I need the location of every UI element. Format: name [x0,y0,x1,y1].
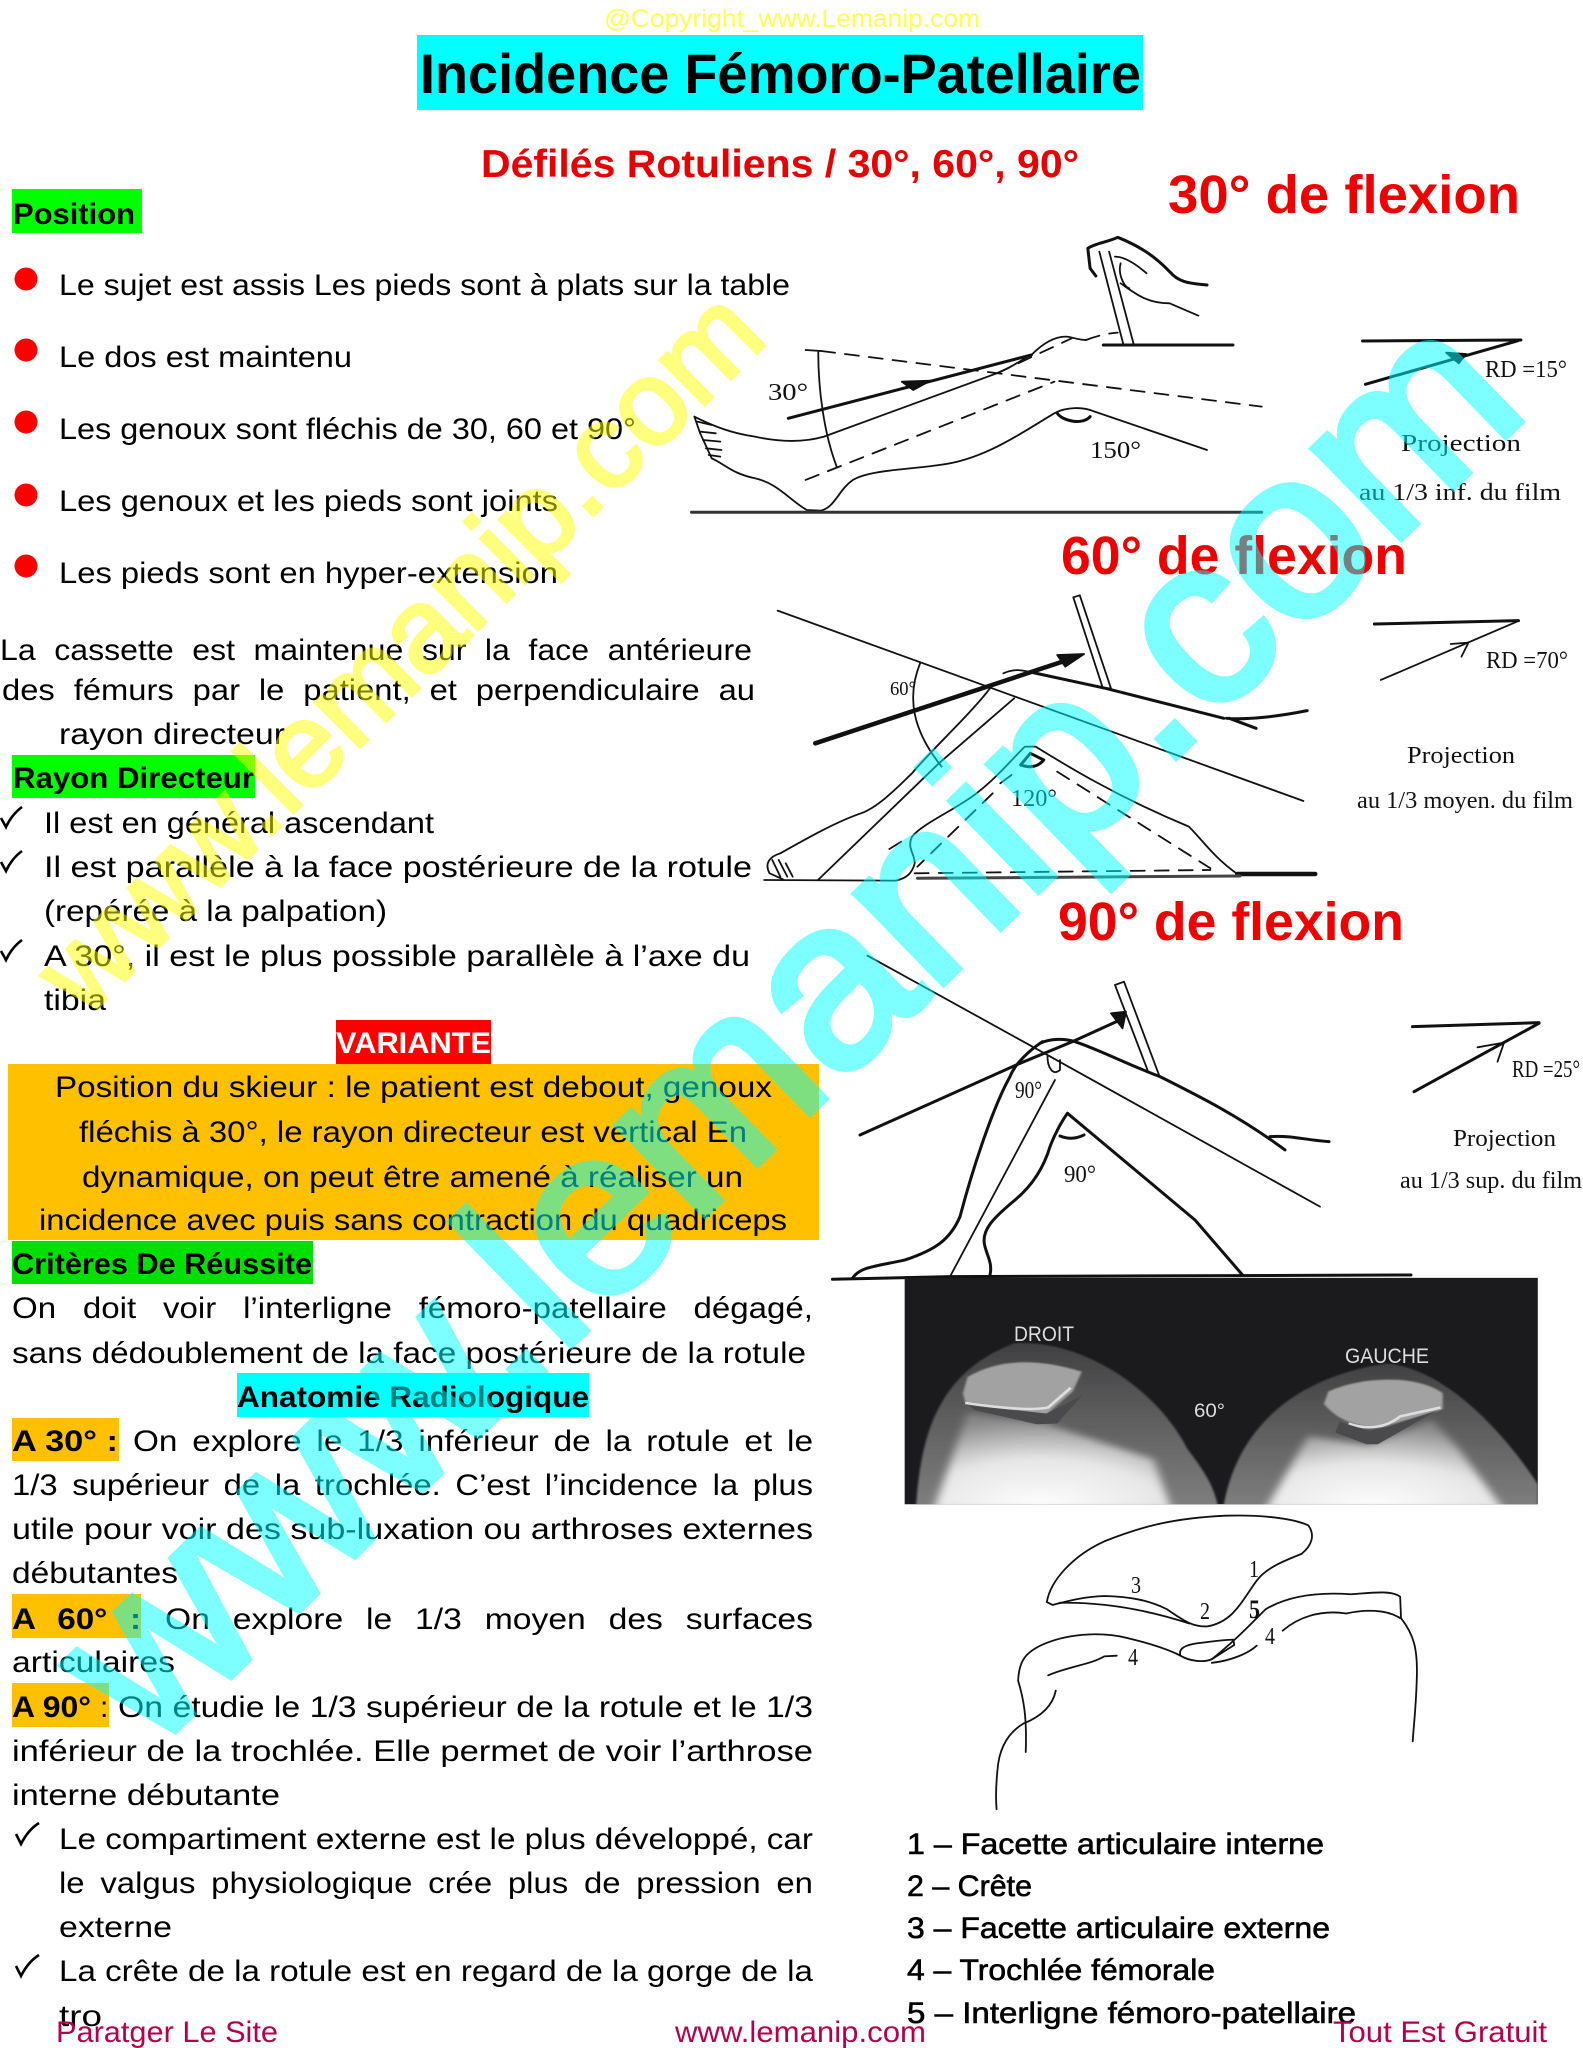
text block: A 30° [12,1418,813,1590]
text block: A 30°: A 30° : [12,1425,118,1458]
text block: A 60° [12,1594,813,1679]
checklist: rayon directeur [1,807,752,1017]
panel: position [0,189,790,751]
heading: 90° de flexion: 90° de flexion [1058,892,1404,952]
bullet list: position: Les genoux sont fléchis de 30, 60 et 90° [59,413,636,446]
panel: critères de réussite [12,1241,813,1370]
x-ray: knees at 60°: DROIT [1014,1323,1074,1346]
legend: anatomy numbers: 4 – Trochlée fémorale [907,1954,1215,1987]
illustration: 90° flexion: 90° [1064,1162,1096,1188]
text block: A 30°: débutantes [12,1557,178,1590]
illustration: 60° flexion: 120° [1011,786,1057,812]
legend: anatomy numbers [907,1828,1356,2030]
panel: variante [8,1020,819,1240]
bullet list: position: Les pieds sont en hyper-extension [59,557,558,590]
RD diagram 90°: au 1/3 sup. du film [1400,1168,1582,1194]
legend: anatomy numbers: 5 – Interligne fémoro-patellaire [907,1997,1356,2030]
anatomy diagram: patella and trochlea [996,1515,1417,1809]
text block: cassette: La cassette est maintenue sur la face antérieure [0,634,752,667]
RD diagram 90° [1400,1023,1582,1194]
callout: position du skieur: dynamique, on peut être amené à réaliser un [82,1161,743,1194]
illustration: 30° flexion [692,237,1567,512]
legend: anatomy numbers: 2 – Crête [907,1870,1032,1903]
RD diagram 60°: RD =70° [1486,648,1568,674]
panel: rayon directeur [1,755,752,1017]
RD diagram 30°: RD =15° [1485,357,1567,383]
text block: A 60°: On explore le 1/3 moyen des surfaces [165,1603,813,1636]
bullet list: position: Le dos est maintenu [59,341,352,374]
subtitle: Défilés Rotuliens / 30°, 60°, 90° [481,143,1079,186]
bullet list: position [14,268,790,590]
watermark: yellow: www.lemanip.com [9,264,788,1039]
checklist: anatomie: Le compartiment externe est le plus développé, car [59,1823,813,1856]
text block: A 90°: inférieur de la trochlée. Elle permet de voir l’arthrose [12,1735,813,1768]
footer [56,2016,1548,2048]
text block: critères [12,1292,813,1370]
anatomy diagram: patella and trochlea: 3 [1131,1573,1141,1599]
legend: anatomy numbers: 1 – Facette articulaire interne [907,1828,1324,1861]
RD diagram 60°: Projection [1407,743,1515,769]
text block: cassette: des fémurs par le patient, et perpendiculaire au [2,674,755,707]
RD diagram 30° [1359,340,1567,506]
text block: critères: On doit voir l’interligne fémoro-patellaire dégagé, [12,1292,813,1325]
anatomy diagram: patella and trochlea: 1 [1249,1557,1259,1583]
RD diagram 60° [1357,621,1573,814]
checklist: anatomie: externe [59,1911,172,1944]
text block: A 30°: 1/3 supérieur de la trochlée. C’est l’incidence la plus [12,1469,813,1502]
heading: critères de réussite: Critères De Réussite [12,1248,312,1281]
callout: position du skieur [8,1064,819,1240]
checklist: rayon directeur: (repérée à la palpation) [44,895,387,928]
bullet list: position: Les genoux et les pieds sont joints [59,485,558,518]
text block: cassette [0,634,755,751]
heading: 60° de flexion: 60° de flexion [1061,526,1407,586]
text block: cassette: rayon directeur [59,718,285,751]
panel: anatomie radiologique [12,1373,813,2033]
heading: rayon directeur: Rayon Directeur [13,762,254,795]
text block: A 60°: articulaires [12,1646,175,1679]
anatomy diagram: patella and trochlea: 5 [1249,1595,1260,1624]
text block: A 90°: A 90° [12,1691,91,1724]
heading: variante: VARIANTE [336,1027,491,1060]
checklist: anatomie [16,1823,813,2033]
checklist: anatomie: La crête de la rotule est en regard de la gorge de la [59,1955,813,1988]
checklist: rayon directeur: Il est parallèle à la face postérieure de la rotule [44,851,752,884]
RD diagram 90°: Projection [1453,1126,1556,1152]
text block: A 60°: A 60° : [12,1603,141,1636]
x-ray: knees at 60°: 60° [1194,1401,1225,1422]
heading: 30° de flexion: 30° de flexion [1168,165,1520,225]
RD diagram 60°: au 1/3 moyen. du film [1357,788,1573,814]
heading: position [12,189,142,233]
illustration: 90° flexion: 90° [1015,1078,1042,1104]
heading: position: Position [13,198,135,231]
text block: critères: sans dédoublement de la face postérieure de la rotule [12,1337,806,1370]
checklist: rayon directeur: Il est en général ascendant [44,807,435,840]
illustration: 60° flexion: 60° [890,678,916,700]
illustration: 30° flexion: 150° [1090,438,1141,464]
checklist: rayon directeur: A 30°, il est le plus possible parallèle à l’axe du [44,940,750,973]
text block: A 90°: : [100,1691,108,1724]
RD diagram 30°: au 1/3 inf. du film [1359,480,1561,506]
legend: anatomy numbers: 3 – Facette articulaire externe [907,1912,1330,1945]
x-ray: knees at 60° [905,1278,1538,1509]
checklist: rayon directeur: tibia [44,984,106,1017]
illustration: 30° flexion: 30° [768,380,808,406]
text block: A 30°: utile pour voir des sub-luxation ou arthroses externes [12,1513,813,1546]
callout: position du skieur: fléchis à 30°, le rayon directeur est vertical En [79,1116,747,1149]
illustration: 90° flexion [832,956,1582,1279]
x-ray: knees at 60°: GAUCHE [1345,1345,1429,1368]
heading: anatomie radiologique: Anatomie Radiologique [237,1381,589,1414]
illustration: 60° flexion [764,595,1573,881]
copyright line: @Copyright_www.Lemanip.com [604,5,980,33]
title: Incidence Fémoro-Patellaire [420,42,1141,105]
RD diagram 30°: Projection [1401,431,1521,457]
callout: position du skieur: Position du skieur : le patient est debout, genoux [55,1071,772,1104]
text block: A 90°: On étudie le 1/3 supérieur de la rotule et le 1/3 [118,1691,813,1724]
text block: A 30°: On explore le 1/3 inférieur de la rotule et le [133,1425,813,1458]
callout: position du skieur: incidence avec puis sans contraction du quadriceps [39,1204,787,1237]
anatomy diagram: patella and trochlea: 4 [1265,1624,1275,1650]
text block: A 90°: interne débutante [12,1779,280,1812]
anatomy diagram: patella and trochlea: 2 [1200,1599,1210,1625]
watermark: cyan: www.lemanip.com [0,257,1568,1792]
checklist: anatomie: le valgus physiologique crée plus de pression en [59,1867,813,1900]
text block: A 90° [12,1683,813,1812]
bullet list: position: Le sujet est assis Les pieds sont à plats sur la table [59,269,790,302]
anatomy diagram: patella and trochlea: 4 [1128,1645,1138,1671]
checklist: anatomie: tro [59,2000,102,2033]
